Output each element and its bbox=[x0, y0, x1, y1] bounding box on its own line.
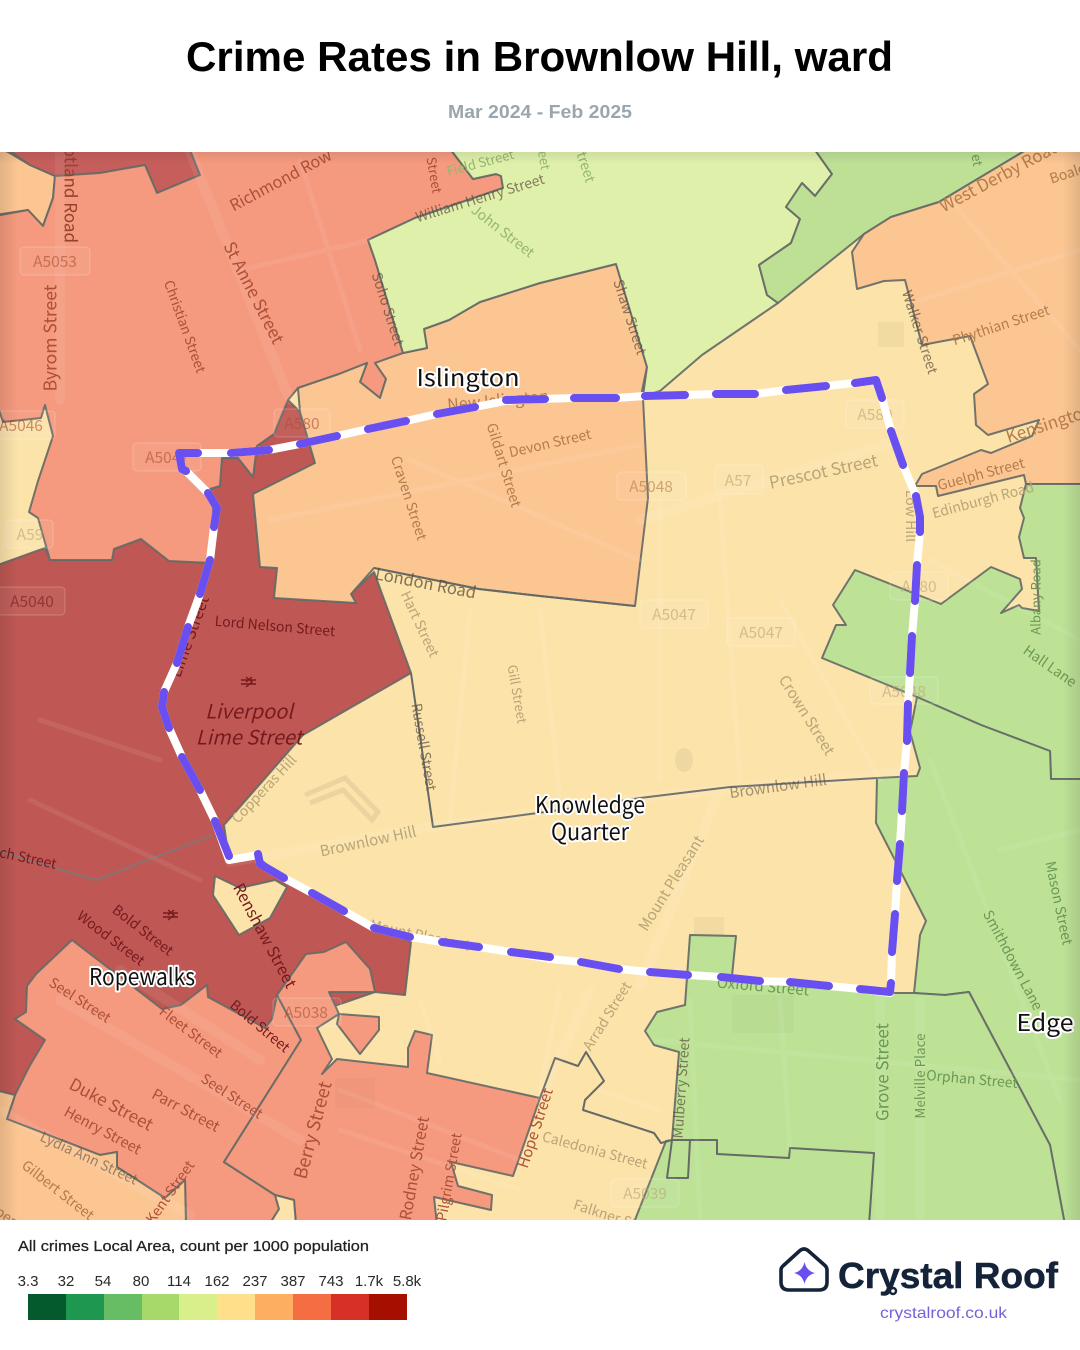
legend colour bar bbox=[28, 1294, 407, 1320]
street name labels: Mount Pleasant bbox=[633, 831, 709, 935]
legend value labels: 3.3 bbox=[18, 1273, 38, 1290]
area: cream patch bottom bbox=[271, 1194, 297, 1220]
street name labels: Kent Street bbox=[141, 1156, 199, 1228]
place name: Islington: Islington bbox=[416, 359, 520, 393]
street name labels: Gill Street bbox=[504, 663, 533, 725]
street name labels: Falkner Street bbox=[571, 1194, 664, 1242]
street name labels: Low Hill bbox=[901, 490, 921, 542]
street name labels: Hope Street bbox=[512, 1085, 558, 1171]
street name labels: Soho Street bbox=[367, 270, 409, 349]
area: small salmon patch bbox=[337, 1014, 379, 1054]
wordmark: Crystal Roof bbox=[838, 1255, 1059, 1296]
street name labels: Lime Street bbox=[196, 722, 305, 750]
road number shields bbox=[0, 247, 948, 1207]
icon: house outline bbox=[781, 1249, 827, 1290]
street name labels: eet bbox=[534, 149, 556, 171]
legend value labels: 114 bbox=[167, 1273, 191, 1290]
street name labels: Gildart Street bbox=[482, 420, 526, 510]
street name labels: Richmond Row bbox=[225, 142, 336, 216]
street name labels: Brownlow Hill bbox=[318, 821, 418, 861]
area: salmon city centre north bbox=[0, 150, 503, 563]
street name labels: Henry Street bbox=[61, 1101, 146, 1159]
boundary purple dashes bbox=[162, 380, 920, 992]
logo: Crystal Roof bbox=[781, 1249, 1059, 1322]
legend value labels bbox=[18, 1273, 422, 1290]
street name labels: Arrad Street bbox=[578, 977, 636, 1054]
icon: key-shaped y descender bbox=[890, 1288, 896, 1294]
place name: Ropewalks: Ropewalks bbox=[89, 958, 195, 992]
road number shields: A580 bbox=[284, 412, 320, 434]
area: dark red top sliver bbox=[8, 150, 200, 193]
street name labels: Walker Street bbox=[897, 288, 943, 377]
place name: Knowledge Quarter: Knowledge bbox=[535, 786, 645, 820]
street name labels: Byrom Street bbox=[38, 284, 62, 391]
street name labels: Craven Street bbox=[386, 453, 432, 543]
street name labels: Field Street bbox=[444, 144, 516, 180]
area: orange Kensington bbox=[852, 150, 1080, 496]
ward sub-boundaries bbox=[0, 568, 877, 1225]
street name labels: Wood Street bbox=[73, 906, 150, 971]
street name labels: Bold Street bbox=[226, 995, 295, 1057]
street name labels: London Road bbox=[373, 560, 479, 604]
street name labels: Hart Street bbox=[396, 588, 444, 661]
legend value labels: 743 bbox=[318, 1273, 344, 1290]
street name labels: Hall Lane bbox=[1019, 640, 1080, 692]
street name labels: Copperas Hill bbox=[227, 750, 301, 828]
street name labels: Mount Pleasant bbox=[368, 915, 473, 956]
road number shields: A5053 bbox=[33, 250, 77, 272]
street name labels: Liverpool bbox=[205, 696, 295, 724]
road number shields: A5040 bbox=[10, 590, 54, 612]
road number shields: A5047 bbox=[145, 446, 189, 468]
road number shields: A580 bbox=[901, 575, 937, 597]
street name labels: Seel Street bbox=[45, 973, 115, 1028]
street name labels: Parr Street bbox=[148, 1083, 224, 1137]
icon: railway station symbol, Central bbox=[163, 910, 178, 920]
street name labels: William Henry Street bbox=[413, 169, 548, 227]
road number shields: A580 bbox=[857, 403, 893, 425]
street name labels: Brownlow Hill bbox=[728, 769, 828, 803]
road number shields: A5047 bbox=[739, 621, 783, 643]
street name labels: Seel Street bbox=[197, 1069, 267, 1124]
area: dark red Lime Street and Ropewalks north bbox=[0, 400, 411, 1095]
base-map roads (faint) bbox=[0, 152, 1080, 1220]
place name: Knowledge Quarter bbox=[535, 792, 646, 846]
street name labels: Prescot Street bbox=[766, 446, 880, 494]
street name labels: Mulberry Street bbox=[667, 1036, 695, 1139]
road number shields: A57 bbox=[725, 469, 751, 491]
street name labels: Duke Street bbox=[66, 1070, 159, 1136]
area: orange Islington south bbox=[253, 264, 648, 606]
legend value labels: 162 bbox=[204, 1273, 230, 1290]
legend value labels: 54 bbox=[95, 1273, 111, 1290]
legend title: All crimes Local Area, count per 1000 population bbox=[18, 1239, 369, 1255]
area: cream base (162-237 band) bbox=[0, 238, 1038, 1220]
street name labels: Lime Street bbox=[162, 592, 214, 680]
street name labels: West Derby Road bbox=[934, 132, 1064, 217]
legend value labels: 1.7k bbox=[355, 1273, 384, 1290]
street name labels: Crown Street bbox=[774, 671, 840, 759]
street name labels: Guelph Street bbox=[935, 453, 1027, 495]
road number shields: A5046 bbox=[0, 414, 43, 436]
legend value labels: 32 bbox=[58, 1273, 74, 1290]
street name labels: Berry Street bbox=[286, 1078, 338, 1182]
street name labels: Fleet Street bbox=[155, 1002, 227, 1063]
street name labels: Caledonia Street bbox=[540, 1126, 651, 1174]
street name labels: et bbox=[968, 152, 988, 168]
place name: Knowledge Quarter: Quarter bbox=[551, 813, 629, 847]
map edge shading bbox=[0, 152, 1080, 1220]
legend value labels: 80 bbox=[133, 1273, 149, 1290]
url: crystalroof.co.uk bbox=[880, 1305, 1008, 1322]
street name labels: John Street bbox=[467, 200, 539, 263]
legend value labels: 237 bbox=[242, 1273, 268, 1290]
road number shields: A59 bbox=[17, 523, 43, 545]
street name labels: Oxford Street bbox=[716, 972, 810, 1001]
road number shields: A5048 bbox=[882, 680, 926, 702]
area: mid green east bbox=[822, 484, 1080, 780]
street name labels: Scotland Road bbox=[60, 128, 84, 243]
road number shields: A5039 bbox=[623, 1182, 667, 1204]
legend value labels: 5.8k bbox=[393, 1273, 422, 1290]
legend: crime rate colour scale bbox=[18, 1239, 422, 1320]
street name labels: Lord Nelson Street bbox=[214, 611, 337, 641]
place name: Edge: Edge bbox=[1016, 1004, 1074, 1038]
street name labels: Albany Road bbox=[1026, 559, 1044, 635]
street name labels: Russell Street bbox=[406, 702, 442, 793]
road number shields: A5048 bbox=[629, 475, 673, 497]
icon: purple star bbox=[794, 1262, 815, 1284]
area: salmon Ropewalks bbox=[7, 940, 301, 1225]
street name labels: New Islington bbox=[446, 383, 550, 415]
street name labels: St Anne Street bbox=[218, 237, 292, 348]
street name labels: Rodney Street bbox=[392, 1114, 434, 1222]
street name labels: Shaw Street bbox=[608, 277, 652, 358]
boundary white casing bbox=[162, 380, 920, 993]
subtitle: date range: Mar 2024 - Feb 2025 bbox=[448, 102, 632, 122]
street name labels: Smithdown Lane bbox=[978, 906, 1048, 1014]
legend value labels: 387 bbox=[280, 1273, 306, 1290]
area: bottom-left orange bbox=[0, 1090, 186, 1225]
street name labels: Edinburgh Road bbox=[930, 477, 1036, 523]
street name labels: Pilgrim Street bbox=[431, 1131, 467, 1223]
ward boundary: Brownlow Hill dashed outline bbox=[162, 380, 920, 993]
street name labels: Devon Street bbox=[507, 424, 594, 462]
street name labels: Orphan Street bbox=[925, 1065, 1019, 1093]
street name labels: Street bbox=[422, 155, 448, 195]
street name labels: Grove Street bbox=[868, 1022, 894, 1121]
road number shields: A5038 bbox=[284, 1001, 328, 1023]
street name labels: Melville Place bbox=[909, 1033, 929, 1119]
title: Crime Rates in Brownlow Hill, ward bbox=[186, 33, 893, 80]
area: cream island at Renshaw Street bbox=[213, 876, 287, 935]
street name labels: Phythian Street bbox=[950, 300, 1053, 350]
street name labels: Bold Street bbox=[108, 900, 178, 961]
icon: railway station symbol, Lime Street bbox=[241, 677, 256, 687]
area: mid green south east bbox=[876, 697, 1080, 1225]
street name labels: Lydia Ann Street bbox=[37, 1127, 142, 1190]
street name labels: Renshaw Street bbox=[228, 878, 304, 992]
area: top-left orange corner bbox=[0, 147, 55, 226]
street name labels: Mason Street bbox=[1040, 859, 1078, 947]
area: mid green Oxford Street south bbox=[633, 935, 1065, 1225]
area: mid green top right bbox=[759, 150, 1026, 303]
street name labels: Christian Street bbox=[160, 277, 212, 375]
street name labels: Gilbert Street bbox=[18, 1155, 99, 1225]
area: salmon Rodney Street bbox=[224, 942, 540, 1225]
road number shields: A5047 bbox=[652, 603, 696, 625]
street name labels: treet bbox=[572, 149, 601, 186]
area: light green top centre bbox=[368, 150, 832, 396]
